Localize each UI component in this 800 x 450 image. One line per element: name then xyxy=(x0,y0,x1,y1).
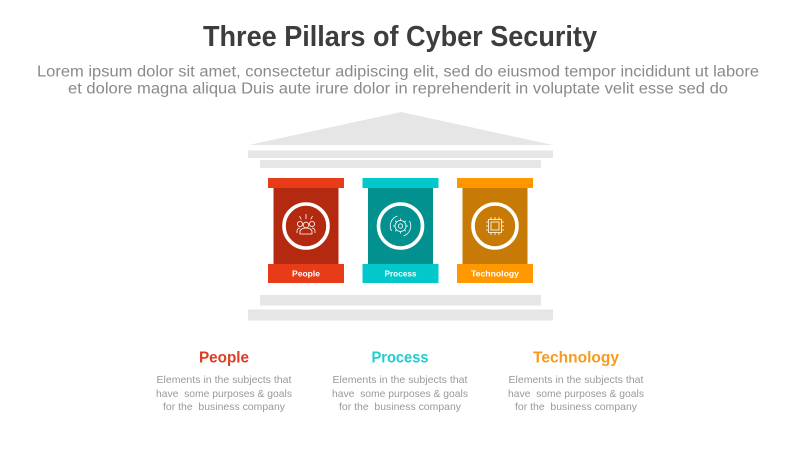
pillar: Process xyxy=(362,178,438,283)
description: People: for the business company xyxy=(163,401,286,413)
title: Three Pillars of Cyber Security xyxy=(203,21,597,53)
description: Technology: for the business company xyxy=(515,401,638,413)
description: Technology: have some purposes & goals xyxy=(508,388,644,400)
description: People: People xyxy=(199,350,249,366)
description: Process: have some purposes & goals xyxy=(332,388,468,400)
pillar: Technology xyxy=(457,178,533,283)
pillar: People: People xyxy=(292,268,320,278)
subtitle text block xyxy=(37,64,759,98)
description: People xyxy=(156,350,292,413)
pillar: Process: Process xyxy=(384,268,417,278)
icon: microchip xyxy=(486,217,504,235)
description: Technology xyxy=(508,350,644,413)
pillar: People xyxy=(268,178,344,283)
description: Process xyxy=(332,350,468,413)
description: Technology: Technology xyxy=(533,350,619,366)
icon: people group xyxy=(297,214,315,234)
description: People: have some purposes & goals xyxy=(156,388,292,400)
description: Process: Elements in the subjects that xyxy=(332,374,468,386)
pillar: Technology: Technology xyxy=(471,268,519,278)
temple roof and upper beams xyxy=(248,112,553,168)
description: People: Elements in the subjects that xyxy=(156,374,292,386)
description: Process: Process xyxy=(372,350,428,366)
subtitle text block: et dolore magna aliqua Duis aute irure dolor in reprehenderit in voluptate velit esse sed do xyxy=(68,80,728,98)
temple lower steps xyxy=(248,295,553,320)
subtitle text block: Lorem ipsum dolor sit amet, consectetur adipiscing elit, sed do eiusmod tempor incididunt ut labore xyxy=(37,64,759,80)
description: Process: for the business company xyxy=(339,401,462,413)
icon: gear with cycle arrows xyxy=(390,216,411,236)
description: Technology: Elements in the subjects that xyxy=(508,374,644,386)
